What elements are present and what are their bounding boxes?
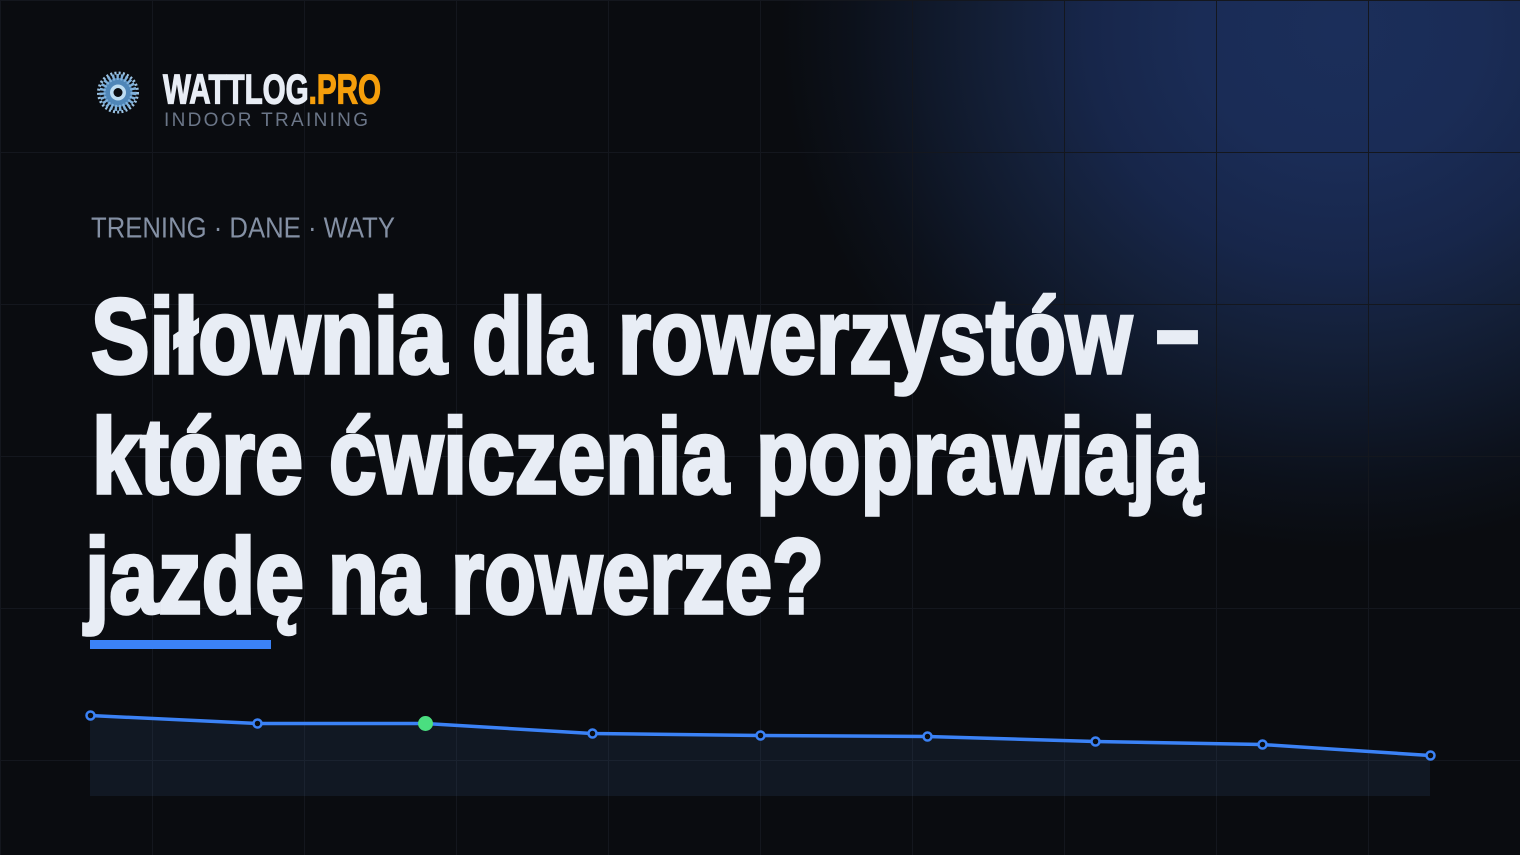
title xyxy=(83,269,1204,636)
title underline accent xyxy=(90,640,271,649)
title: poprawiają xyxy=(756,396,1204,516)
kicker: TRENING · DANE · WATY xyxy=(91,212,395,244)
title: – xyxy=(1156,269,1199,389)
title: ćwiczenia xyxy=(329,396,730,516)
brand wordmark: WATTLOG.PRO xyxy=(163,66,381,112)
icon: cassette gear logo xyxy=(98,73,138,112)
title: dla xyxy=(472,276,593,396)
line chart xyxy=(86,712,1434,796)
title: rowerze? xyxy=(451,516,824,636)
highlighted data point xyxy=(418,716,433,731)
title: które xyxy=(92,396,303,516)
chart area fill xyxy=(90,716,1430,796)
title: na xyxy=(328,516,426,636)
title: Siłownia xyxy=(91,276,448,396)
chart line xyxy=(90,716,1430,756)
brand tagline: INDOOR TRAINING xyxy=(164,110,368,131)
title: jazdę xyxy=(83,516,304,636)
chart data points xyxy=(86,712,1434,760)
title: rowerzystów xyxy=(618,276,1133,396)
